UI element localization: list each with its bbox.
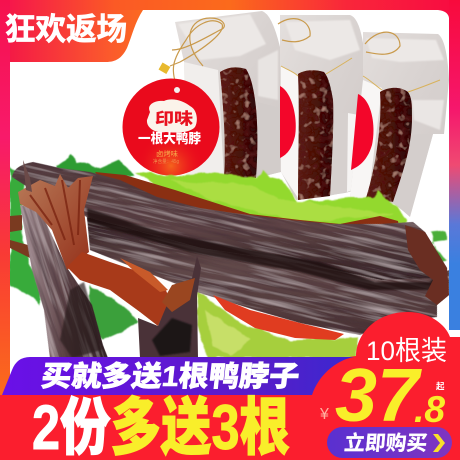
price block xyxy=(319,336,447,437)
neck lower xyxy=(61,138,460,414)
front neck left xyxy=(0,179,153,384)
lettuce top left xyxy=(56,154,136,178)
lettuce lower middle xyxy=(197,292,358,358)
lettuce lower left xyxy=(88,285,139,340)
bag 2 xyxy=(278,15,364,200)
purple banner xyxy=(2,357,354,395)
neck cut end xyxy=(405,225,449,305)
footer shape xyxy=(0,395,320,460)
neck shadow seam xyxy=(87,208,440,290)
front neck right shadow xyxy=(152,318,192,356)
buy button xyxy=(327,427,452,458)
price decimal: .8 xyxy=(414,389,445,430)
tab text: 狂欢返场 xyxy=(5,12,127,47)
lettuce lower highlight xyxy=(205,310,250,355)
tag weight: 净含量：45g xyxy=(153,158,179,165)
lettuce left xyxy=(10,166,40,305)
banner text: 买就多送1根鸭脖子 xyxy=(40,361,301,393)
orange inner meat xyxy=(95,172,400,232)
pack count: 10根装 xyxy=(366,336,447,366)
currency sign: ¥ xyxy=(319,406,329,423)
tag glow xyxy=(122,78,220,176)
frame top xyxy=(0,0,460,10)
button text: 立即购买 xyxy=(343,431,428,455)
lettuce xyxy=(10,154,447,358)
frame right xyxy=(438,0,460,330)
front neck left shadow xyxy=(60,282,102,358)
price badge background xyxy=(311,312,460,460)
tag string xyxy=(170,21,222,90)
tag hole xyxy=(174,87,180,93)
tag logo text: 印味 xyxy=(155,110,193,128)
price integer: 37 xyxy=(335,353,422,437)
red footer with headline xyxy=(0,393,320,460)
lettuce right xyxy=(430,230,447,262)
frame left xyxy=(0,0,10,460)
button arrow xyxy=(433,434,445,452)
product bags xyxy=(159,11,449,217)
tomato slice xyxy=(213,295,344,340)
bag 1 xyxy=(159,11,281,178)
tag name: 一根大鸭脖 xyxy=(138,131,201,146)
neck upper xyxy=(0,67,460,380)
button shape xyxy=(327,427,452,458)
price suffix: 起 xyxy=(436,381,445,391)
tab shape xyxy=(10,10,143,62)
neck tip xyxy=(23,160,32,192)
frayed strands xyxy=(30,180,80,245)
lettuce highlight xyxy=(170,180,395,222)
banner shape xyxy=(2,357,354,395)
front neck right xyxy=(138,256,201,358)
duck necks xyxy=(0,67,460,414)
orange strand highlight xyxy=(120,258,168,292)
header tab xyxy=(5,10,143,62)
tag logo cloud xyxy=(147,99,197,132)
bag 3 xyxy=(350,32,449,217)
front neck right frayed xyxy=(162,278,195,312)
red round hang tag xyxy=(122,21,222,176)
orange strands xyxy=(67,252,170,326)
lettuce top main xyxy=(136,170,407,232)
front neck left frayed top xyxy=(18,174,93,270)
tag flavour: 卤烤味 xyxy=(156,149,178,158)
left background slices xyxy=(10,215,30,258)
tag disc xyxy=(122,78,220,176)
